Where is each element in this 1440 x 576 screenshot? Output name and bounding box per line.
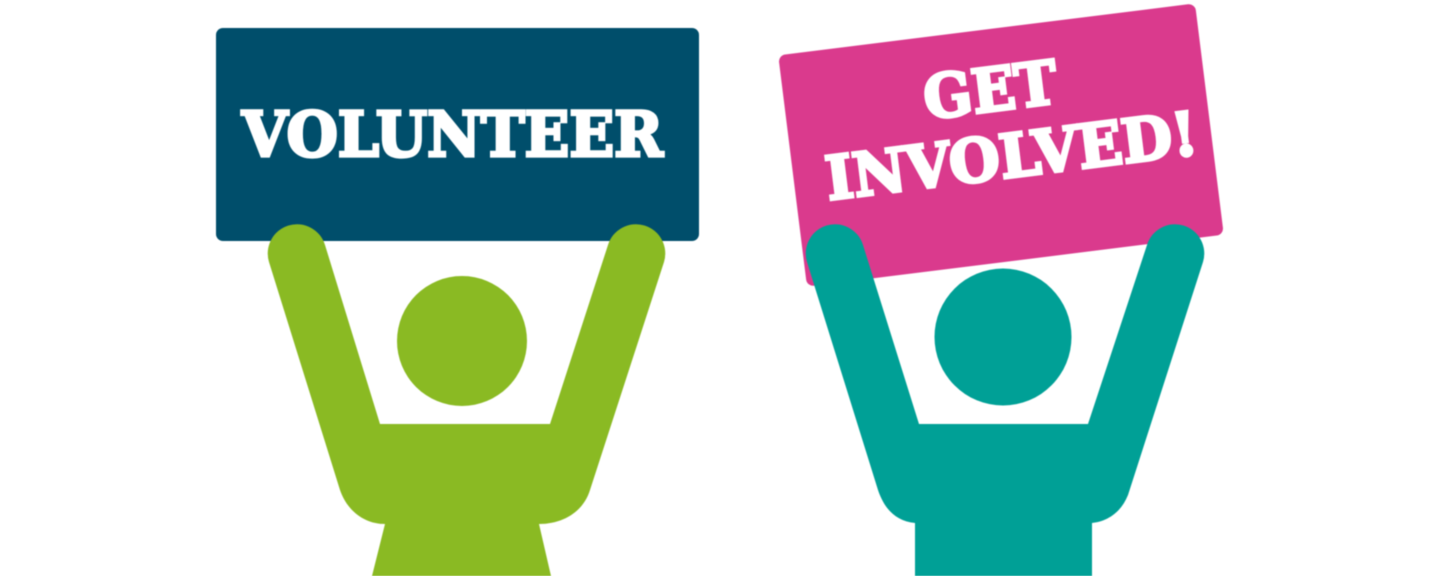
icon: teal figure head [934,268,1072,406]
sign text: get involved [813,32,1202,215]
sign text line: GET: GET [920,48,1061,134]
sign text line: INVOLVED!: INVOLVED! [822,99,1202,215]
icon: teal figure body with raised arms [806,224,1204,576]
sign text: volunteer: VOLUNTEER [241,98,663,171]
sign: volunteer [216,28,699,241]
icon: green figure body with raised arms [268,224,665,576]
sign: get involved [778,3,1224,287]
icon: green figure head [397,276,527,406]
panel: teal get involved figure with sign [778,3,1224,576]
panel: green volunteer figure with sign [216,28,699,576]
